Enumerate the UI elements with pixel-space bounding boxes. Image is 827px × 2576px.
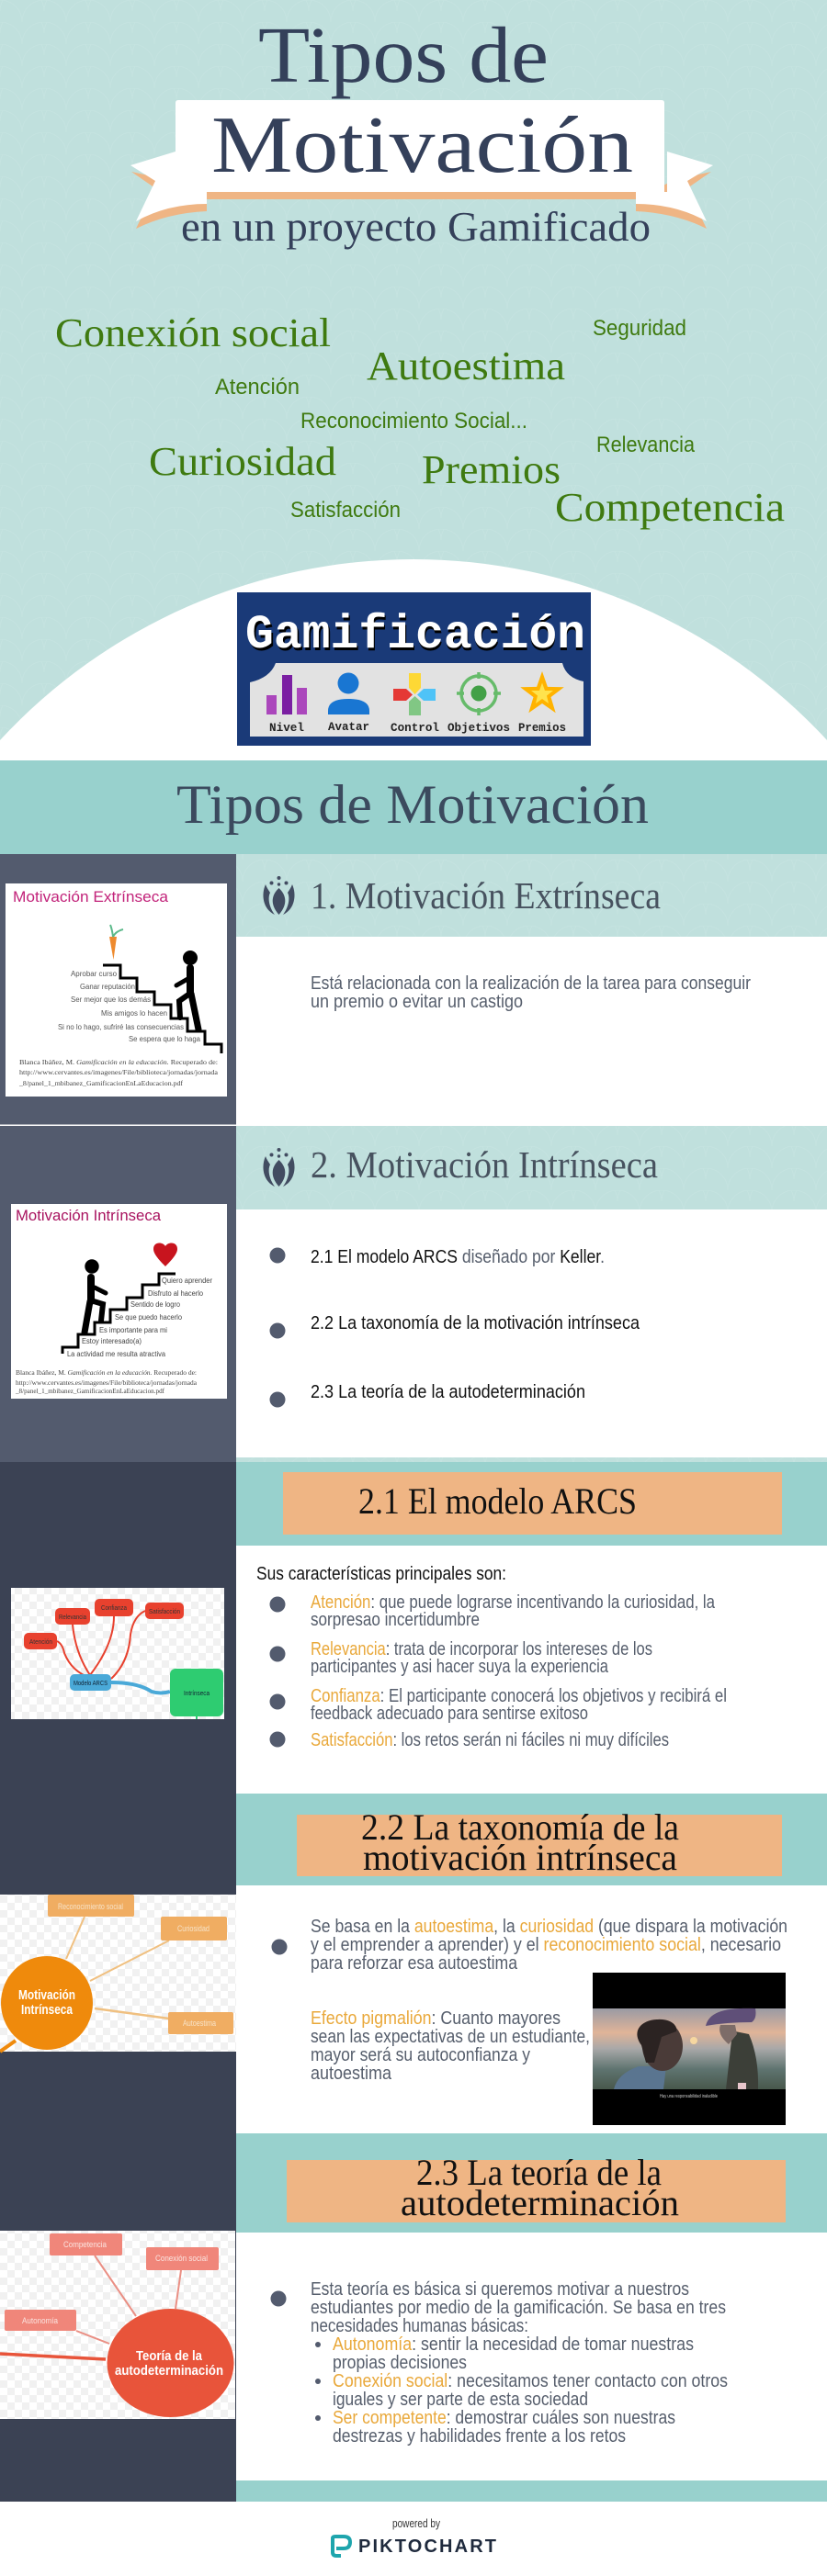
panel: 2.2 La taxonomía xyxy=(236,1794,827,2125)
map node: Autonomía xyxy=(5,2310,76,2331)
word cloud xyxy=(55,310,785,530)
heading box: 2.1 El modelo ARCS xyxy=(358,1480,637,1522)
heading box xyxy=(283,1472,782,1535)
list item 2.2: 2.2 La taxonomía de la motivación intrínseca xyxy=(311,1312,640,1333)
closing teal strip xyxy=(236,2480,827,2502)
section heading: Tipos de Motivación xyxy=(176,774,649,835)
description xyxy=(311,973,751,1012)
map hub: Intrínseca xyxy=(21,2002,74,2018)
paragraph: Esta teoría es básica si queremos motivar a nuestros xyxy=(311,2278,689,2300)
left column top xyxy=(0,854,236,1462)
need: Ser competente: destrezas y habilidades frente a los retos xyxy=(333,2425,626,2447)
step labels: Ganar reputación xyxy=(80,983,135,991)
icon: Piktochart logo xyxy=(333,2537,350,2556)
need: Autonomía xyxy=(315,2334,694,2373)
item: Confianza xyxy=(270,1685,727,1724)
image: film still xyxy=(593,1973,786,2125)
icon: lotus xyxy=(263,1148,295,1187)
bullet paragraph xyxy=(272,1916,787,1974)
image title: Motivación Intrínseca xyxy=(16,1207,162,1224)
word: Competencia: Competencia xyxy=(555,485,785,530)
step labels: Estoy interesado(a) xyxy=(82,1337,142,1345)
map node: Curiosidad xyxy=(161,1917,227,1940)
subtitle: Hay una responsabilidad inaludible xyxy=(660,2094,718,2099)
list item 2.3 xyxy=(270,1381,585,1407)
panel: hero background xyxy=(0,0,827,760)
image: extrinsic motivation staircase xyxy=(6,883,227,1097)
step labels: Aprobar curso xyxy=(71,970,118,978)
title xyxy=(181,10,651,250)
word: Premios: Premios xyxy=(422,447,561,492)
item: Atención: Atención: que puede lograrse incentivando la curiosidad, la xyxy=(311,1592,715,1613)
left column bottom xyxy=(0,1462,236,2502)
panel: 1. Motivación Extrínseca xyxy=(236,854,827,1126)
citation: _8/panel_1_mbibanez_GamificacionEnLaEducacion.pdf xyxy=(15,1387,164,1395)
map hub: autodeterminación xyxy=(115,2363,223,2379)
step labels: Se que puedo hacerlo xyxy=(115,1313,183,1322)
map node: Autoestima xyxy=(168,2012,233,2034)
icon: level bars xyxy=(266,675,307,714)
map hub: Teoría de la xyxy=(136,2348,203,2364)
map node: Reconocimiento social: Reconocimiento social xyxy=(58,1902,123,1911)
map node: Confianza xyxy=(95,1599,133,1616)
map node: Competencia xyxy=(50,2233,122,2255)
map node: Conexión social xyxy=(146,2247,219,2270)
word: Autoestima: Autoestima xyxy=(367,343,565,388)
step labels xyxy=(58,970,201,1043)
icon: carrot xyxy=(109,925,123,960)
list item 2.2 xyxy=(270,1312,640,1339)
badge title: Gamificación xyxy=(245,608,585,662)
map node: Modelo ARCS xyxy=(70,1674,111,1691)
heading box: 2.3 La teoría de la xyxy=(416,2152,662,2193)
need: Conexión social: iguales y ser parte de esta sociedad xyxy=(333,2389,588,2410)
citation: http://www.cervantes.es/imagenes/File/biblioteca/jornadas/jornada xyxy=(19,1068,219,1076)
white arc behind the gamification badge xyxy=(0,559,827,760)
citation xyxy=(18,1058,219,1087)
citation: Blanca Ibáñez, M. Gamificación en la educación. Recuperado de: xyxy=(19,1058,218,1066)
heading box xyxy=(287,2152,786,2223)
map connectors xyxy=(0,2255,181,2359)
gamification badge xyxy=(237,592,591,746)
bullet paragraph: Se basa en la autoestima, la curiosidad (que dispara la motivación xyxy=(311,1916,787,1937)
need: Conexión social: Conexión social: necesitamos tener contacto con otros xyxy=(333,2370,728,2391)
word: Atención: Atención xyxy=(215,375,300,399)
item: Relevancia xyxy=(270,1638,652,1677)
footer: powered by Piktochart xyxy=(333,2516,496,2557)
icon: heart xyxy=(153,1243,177,1266)
step labels: Mis amigos lo hacen xyxy=(101,1009,167,1018)
pygmalion paragraph: autoestima xyxy=(311,2063,392,2084)
icon: star xyxy=(520,671,564,713)
map node: Satisfacción: Satisfacción xyxy=(149,1609,180,1615)
item: Relevancia: participantes y asi hacer suya la experiencia xyxy=(311,1656,608,1677)
description: un premio o evitar un castigo xyxy=(311,991,523,1012)
word: Relevancia: Relevancia xyxy=(596,433,696,457)
stairs xyxy=(103,965,221,1053)
image title: Motivación Extrínseca xyxy=(13,888,169,906)
heading box xyxy=(297,1806,782,1878)
heading box: autodeterminación xyxy=(401,2182,679,2223)
badge tray xyxy=(250,663,583,737)
item: Confianza: feedback adecuado para sentirse exitoso xyxy=(311,1703,588,1724)
icon captions: Premios xyxy=(518,721,566,735)
heading box: 2.2 La taxonomía de la xyxy=(361,1806,679,1848)
paragraph: necesidades humanas básicas: xyxy=(311,2315,528,2336)
icon: lotus xyxy=(263,876,295,915)
step labels: Sentido de logro xyxy=(130,1300,181,1309)
wordmark: PIKTOCHART xyxy=(358,2537,496,2557)
item: Atención xyxy=(270,1592,715,1630)
step labels: Disfruto al hacerlo xyxy=(148,1289,204,1298)
step labels xyxy=(67,1277,212,1358)
word: Conexión social: Conexión social xyxy=(55,310,331,355)
pygmalion paragraph: mayor será su autoconfianza y xyxy=(311,2044,531,2065)
intro line: Sus características principales son: xyxy=(256,1563,506,1584)
list item 2.1: 2.1 El modelo ARCS diseñado por Keller. xyxy=(311,1246,605,1267)
stairs xyxy=(62,1274,176,1354)
map node: Conexión social: Conexión social xyxy=(155,2254,208,2263)
map node: Intrínseca: Intrínseca xyxy=(184,1691,210,1697)
title line: Tipos de: Tipos de xyxy=(258,10,549,99)
item: Atención: sorpresao incertidumbre xyxy=(311,1609,480,1630)
image: self-determination mind map xyxy=(0,2231,235,2419)
map node: Autonomía: Autonomía xyxy=(22,2316,58,2325)
description: Está relacionada con la realización de la tarea para conseguir xyxy=(311,973,751,994)
item: Relevancia: Relevancia: trata de incorporar los intereses de los xyxy=(311,1638,652,1659)
map hub xyxy=(107,2309,233,2417)
item: Satisfacción: Satisfacción: los retos serán ni fáciles ni muy difíciles xyxy=(311,1729,669,1750)
pygmalion paragraph xyxy=(311,2008,590,2084)
step labels: Es importante para mi xyxy=(99,1326,167,1334)
step labels: La actividad me resulta atractiva xyxy=(67,1350,166,1358)
step labels: Ser mejor que los demás xyxy=(71,996,151,1004)
list item 2.3: 2.3 La teoría de la autodeterminación xyxy=(311,1381,585,1402)
map node: Satisfacción xyxy=(145,1603,184,1619)
heading: 1. Motivación Extrínseca xyxy=(311,874,661,917)
panel: 2.3 La teoría xyxy=(236,2133,827,2447)
image: intrinsic motivation staircase xyxy=(11,1204,227,1399)
bullet paragraph: y el emprender a aprender) y el reconocimiento social, necesario xyxy=(311,1934,781,1955)
title line: Motivación: Motivación xyxy=(211,101,633,190)
bullet paragraph: para reforzar esa autoestima xyxy=(311,1952,518,1974)
map node: Reconocimiento social xyxy=(48,1895,134,1917)
icon captions xyxy=(269,720,566,735)
map hub xyxy=(1,1956,93,2050)
citation xyxy=(15,1368,198,1395)
panel: 2.1 El modelo ARCS xyxy=(236,1462,827,1750)
need: Ser competente: Ser competente: demostrar cuáles son nuestras xyxy=(333,2407,675,2428)
map connectors xyxy=(57,1611,197,1719)
icon captions: Avatar xyxy=(328,720,369,734)
heading: 2. Motivación Intrínseca xyxy=(311,1143,658,1186)
word: Satisfacción: Satisfacción xyxy=(290,498,401,523)
map node: Atención: Atención xyxy=(29,1639,52,1646)
citation: _8/panel_1_mbibanez_GamificacionEnLaEducacion.pdf xyxy=(18,1079,184,1087)
word: Curiosidad: Curiosidad xyxy=(149,439,336,484)
map hub: Motivación xyxy=(18,1987,75,2003)
icon captions: Control xyxy=(391,721,439,735)
icon captions: Objetivos xyxy=(447,721,510,735)
image: intrinsic taxonomy mind map xyxy=(0,1895,236,2052)
map node: Relevancia: Relevancia xyxy=(59,1614,86,1621)
map node: Autoestima: Autoestima xyxy=(183,2019,216,2028)
map node: Curiosidad: Curiosidad xyxy=(177,1924,210,1933)
pygmalion paragraph: Efecto pigmalión: Cuanto mayores xyxy=(311,2008,561,2029)
map node: Intrínseca xyxy=(170,1669,223,1716)
citation: http://www.cervantes.es/imagenes/File/biblioteca/jornadas/jornada xyxy=(16,1378,198,1387)
step labels: Si no lo hago, sufriré las consecuencias xyxy=(58,1023,184,1031)
word: Reconocimiento Social: Reconocimiento Social... xyxy=(300,409,527,433)
need: Autonomía: propias decisiones xyxy=(333,2352,467,2373)
man xyxy=(614,2019,683,2089)
step labels: Se espera que lo haga xyxy=(129,1035,201,1043)
person climbing xyxy=(176,951,198,1029)
icon: target xyxy=(457,672,501,715)
image: ARCS mind map xyxy=(11,1588,224,1719)
pygmalion paragraph: sean las expectativas de un estudiante, xyxy=(311,2026,590,2047)
map node: Competencia: Competencia xyxy=(63,2240,107,2249)
panel: 2. Motivación Intrínseca xyxy=(236,1126,827,1462)
need: Ser competente xyxy=(315,2407,675,2447)
map node: Modelo ARCS: Modelo ARCS xyxy=(74,1681,108,1687)
heading box: motivación intrínseca xyxy=(363,1837,677,1878)
need: Conexión social xyxy=(315,2370,728,2410)
icon: avatar xyxy=(328,672,369,714)
map node: Relevancia xyxy=(55,1608,90,1625)
paragraph: estudiantes por medio de la gamificación. Se basa en tres xyxy=(311,2297,726,2318)
map connectors xyxy=(0,1917,169,2052)
step labels: Quiero aprender xyxy=(162,1277,212,1285)
subtitle: en un proyecto Gamificado xyxy=(181,203,651,250)
item: Confianza: Confianza: El participante conocerá los objetivos y recibirá el xyxy=(311,1685,727,1706)
word: Seguridad: Seguridad xyxy=(593,316,686,341)
girl xyxy=(706,2008,758,2089)
icon captions: Nivel xyxy=(269,721,304,735)
map node: Confianza: Confianza xyxy=(101,1605,127,1612)
badge title: Gamificación xyxy=(247,611,585,665)
ribbon banner xyxy=(130,100,713,229)
map node: Atención xyxy=(24,1633,57,1649)
powered by label: powered by xyxy=(392,2516,440,2530)
person climbing xyxy=(85,1259,106,1333)
band: Tipos de Motivación xyxy=(0,760,827,854)
need: Autonomía: Autonomía: sentir la necesidad de tomar nuestras xyxy=(333,2334,694,2355)
paragraph xyxy=(270,2278,726,2336)
citation: Blanca Ibáñez, M. Gamificación en la educación. Recuperado de: xyxy=(16,1368,197,1377)
icon: control xyxy=(393,673,436,715)
